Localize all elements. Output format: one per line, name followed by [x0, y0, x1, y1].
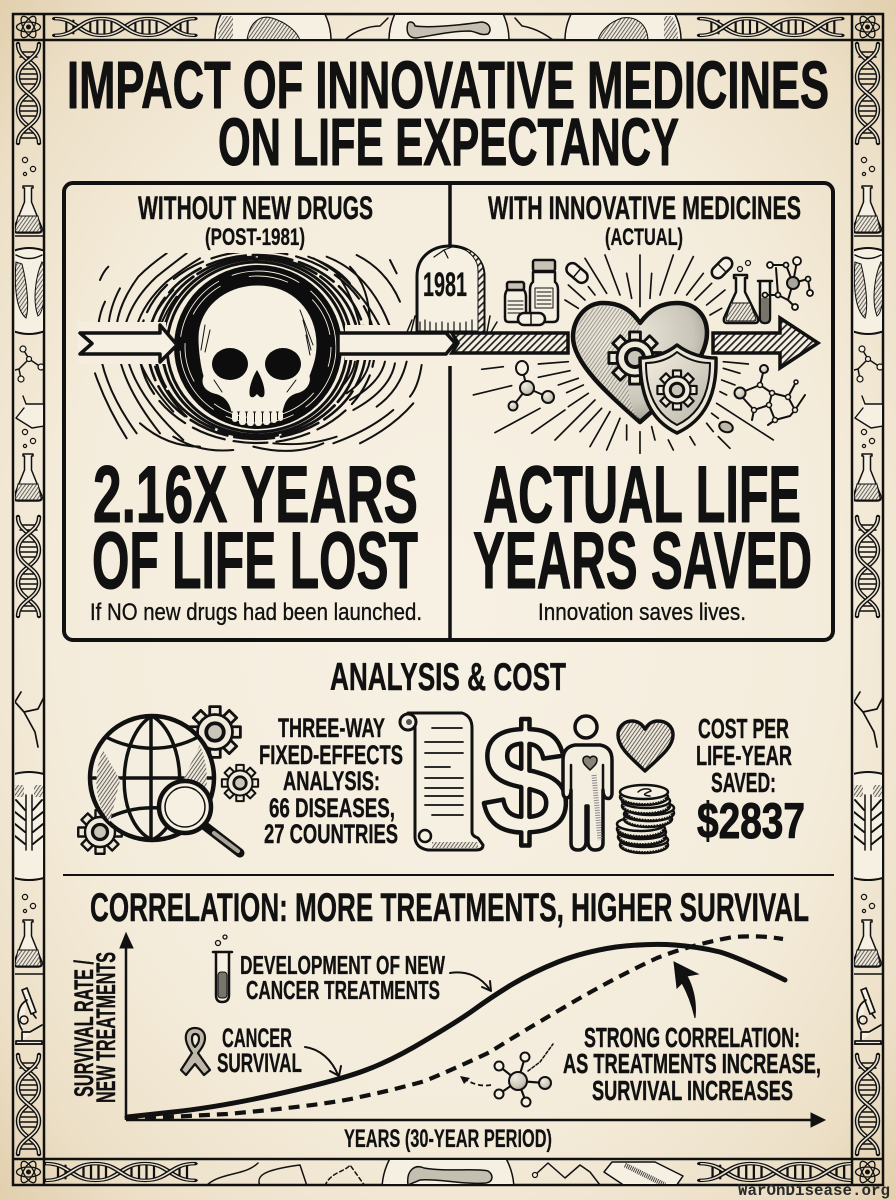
icon: skull in dark vortex — [95, 251, 422, 451]
big text: years of life lost: OF LIFE LOST — [92, 516, 418, 606]
text: cost per life-year saved: LIFE-YEAR — [696, 740, 792, 771]
swirling streaks in zoom coordinates — [95, 253, 422, 451]
icon: coin stack — [617, 785, 674, 853]
icon: heart with gear and shield — [573, 303, 716, 433]
title — [67, 48, 829, 180]
arrow: big curved arrow to intersection — [674, 962, 698, 1018]
label: cancer survival: SURVIVAL — [217, 1048, 302, 1078]
icon: radiating lines — [473, 255, 773, 453]
icon: molecule with dashed arrow — [460, 1044, 553, 1106]
icon: flask and test tube — [724, 260, 772, 323]
heading: analysis and cost: ANALYSIS & COST — [330, 656, 566, 699]
border: right strip icons — [854, 42, 882, 1156]
arrow: to treatments curve — [450, 972, 491, 991]
tombstone year: 1981 — [423, 266, 467, 304]
border: bottom strip icons — [45, 1160, 851, 1184]
axis label: x: YEARS (30-YEAR PERIOD) — [344, 1125, 552, 1153]
line: new treatments dashed curve — [127, 936, 783, 1119]
icon: person with heart — [563, 716, 612, 850]
text: three-way fixed-effects analysis: THREE-WAY — [278, 713, 385, 743]
axis label: y — [69, 952, 121, 1103]
label: development of new cancer treatments — [240, 950, 445, 1005]
big text: actual life years saved — [473, 450, 812, 606]
label: cancer survival — [217, 1023, 302, 1078]
arrow: outlined arrow through skull — [78, 322, 455, 364]
text: three-way fixed-effects analysis: ANALYSIS: — [283, 766, 380, 796]
text: three-way fixed-effects analysis: FIXED-EFFECTS — [259, 740, 403, 770]
caption: if no new drugs: If NO new drugs had been launched. — [90, 599, 422, 626]
axis label: y: SURVIVAL RATE / — [69, 960, 99, 1097]
cost value: $2837 — [697, 793, 805, 849]
icon: paper scroll — [400, 713, 483, 850]
axis label: y: NEW TREATMENTS — [91, 952, 121, 1103]
caption: innovation saves lives: Innovation saves lives. — [538, 599, 746, 626]
icon: test tube — [213, 935, 232, 1002]
label: cancer survival: CANCER — [222, 1023, 292, 1053]
icon: heart — [618, 721, 673, 771]
icon: globe with magnifier and gears — [78, 707, 258, 854]
chart axes — [120, 933, 825, 1127]
border: top strip icons — [52, 15, 845, 39]
text: cost per life-year saved: SAVED: — [711, 767, 776, 798]
panel: comparison — [64, 183, 833, 640]
icon: molecules — [508, 257, 813, 425]
label: development of new cancer treatments: DEVELOPMENT OF NEW — [240, 950, 445, 980]
icon: medicine bottles and pills — [505, 255, 735, 434]
text: cost per life-year saved: COST PER — [698, 713, 789, 744]
text: three-way fixed-effects analysis — [259, 713, 403, 849]
chart: survival and treatments over time — [69, 933, 825, 1153]
label: strong correlation: SURVIVAL INCREASES — [592, 1075, 793, 1106]
label: strong correlation — [563, 1022, 821, 1106]
line: cancer survival solid curve — [127, 944, 785, 1117]
arrow: to survival curve — [305, 1047, 341, 1076]
text: cost per life-year saved — [696, 713, 805, 849]
watermark: WarOnDisease.org — [738, 1182, 890, 1200]
panel heading: without new drugs: WITHOUT NEW DRUGS — [138, 190, 373, 226]
big text: years of life lost: 2.16X YEARS — [93, 450, 418, 540]
label: development of new cancer treatments: CANCER TREATMENTS — [246, 975, 440, 1005]
text: three-way fixed-effects analysis: 27 COUNTRIES — [264, 819, 398, 849]
panel heading: with innovative medicines: (ACTUAL) — [605, 224, 683, 251]
icon: dollar sign: $ — [482, 694, 568, 867]
arrow: hatched arrow through heart — [452, 318, 818, 368]
panel heading: with innovative medicines — [488, 190, 801, 251]
panel heading: without new drugs — [138, 190, 373, 251]
icon: tombstone 1981 — [407, 246, 497, 332]
panel heading: without new drugs: (POST-1981) — [205, 224, 305, 251]
icon: cancer ribbon — [181, 1028, 210, 1075]
text: three-way fixed-effects analysis: 66 DISEASES, — [269, 793, 395, 823]
border: left strip icons — [15, 42, 43, 1156]
big text: years of life lost — [92, 450, 418, 606]
